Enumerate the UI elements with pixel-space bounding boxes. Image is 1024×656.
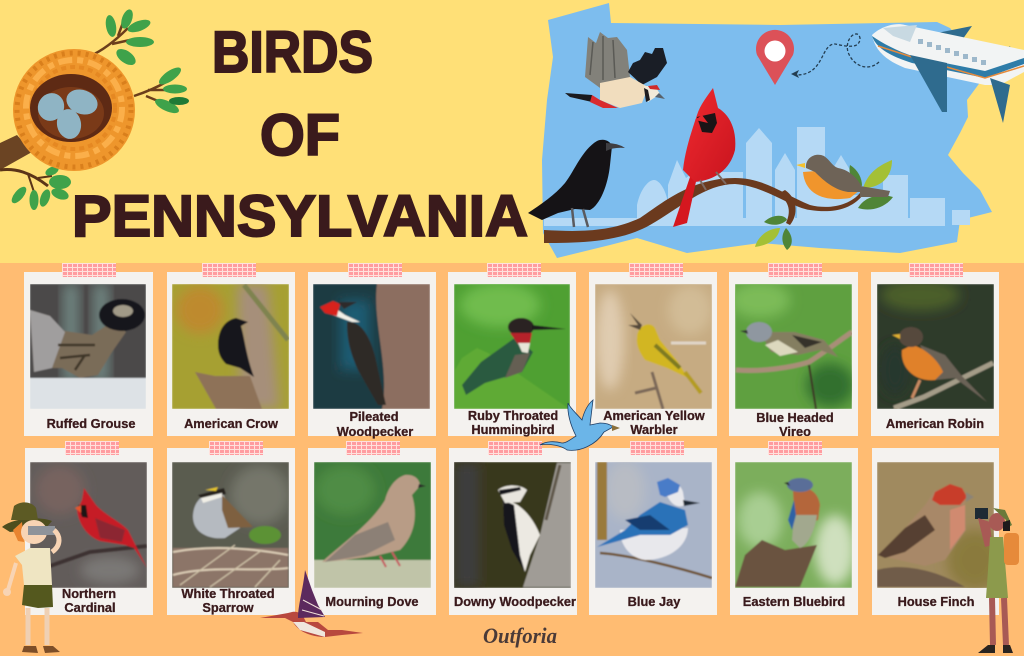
- photo card row 1: Ruffed Grouse: [24, 263, 153, 436]
- tape: [62, 263, 116, 277]
- background: orange lower section: [0, 263, 1024, 656]
- tape: [909, 263, 963, 277]
- label: Mourning Dove: [325, 594, 419, 609]
- photo card row 1: American Yellow Warbler: [589, 263, 717, 437]
- airplane: [872, 24, 1024, 123]
- Outforia logo: Outforia: [483, 623, 557, 648]
- title: BIRDS: [212, 20, 373, 85]
- leaves: [755, 160, 893, 250]
- photo card row 1: Ruby Throated Hummingbird: [448, 263, 576, 437]
- tape: [768, 441, 822, 455]
- photo card row 2: White Throated Sparrow: Sparrow: [202, 600, 254, 615]
- label: Downy Woodpecker: [454, 594, 576, 609]
- tape: [348, 263, 402, 277]
- tape: [629, 263, 683, 277]
- photo card row 1: Ruby Throated Hummingbird: Hummingbird: [471, 422, 555, 437]
- cardinal: [673, 88, 735, 227]
- tape: [346, 441, 400, 455]
- woodpecker flying: [565, 32, 667, 108]
- hummingbird overlay: [260, 570, 363, 637]
- ranger character with binoculars: [2, 502, 60, 653]
- robin: [796, 155, 890, 199]
- map shape: [542, 3, 992, 258]
- label: Ruffed Grouse: [47, 416, 135, 431]
- tape: [209, 441, 263, 455]
- illustration: nest with eggs: [0, 8, 189, 210]
- label: White Throated: [181, 586, 275, 601]
- tape: [488, 441, 542, 455]
- dashed flight path: [791, 34, 879, 78]
- label: Blue Jay: [628, 594, 681, 609]
- tape: [487, 263, 541, 277]
- photo card row 2: Northern Cardinal: [25, 441, 153, 615]
- photo card row 1: American Robin: [871, 263, 999, 436]
- title: [72, 20, 528, 249]
- photo card row 2: Mourning Dove: [308, 441, 436, 615]
- photo card row 2: Eastern Bluebird: [730, 441, 858, 615]
- title: PENNSYLVANIA: [72, 184, 528, 249]
- tape: [768, 263, 822, 277]
- title: OF: [260, 103, 340, 168]
- label: House Finch: [898, 594, 975, 609]
- tape: [630, 441, 684, 455]
- photo card row 2: Downy Woodpecker: [449, 441, 577, 615]
- photo card row 2: Northern Cardinal: Cardinal: [64, 600, 116, 615]
- photo card row 2: Blue Jay: [589, 441, 717, 615]
- city skyline: [544, 127, 970, 226]
- label: Northern: [62, 586, 116, 601]
- crow: [528, 140, 625, 227]
- branch: [544, 178, 863, 243]
- tape: [202, 263, 256, 277]
- photo card row 2: White Throated Sparrow: [167, 441, 295, 615]
- photo card row 1: Blue Headed Vireo: [729, 263, 858, 439]
- label: American Robin: [886, 416, 984, 431]
- photo card row 1: Pileated Woodpecker: Woodpecker: [337, 424, 413, 439]
- photo card row 1: Pileated Woodpecker: [308, 263, 436, 439]
- label: Pileated: [349, 409, 399, 424]
- photo card row 2: House Finch: [872, 448, 1003, 615]
- photo card row 1: Blue Headed Vireo: Vireo: [779, 424, 811, 439]
- label: American Crow: [184, 416, 278, 431]
- tape: [65, 441, 119, 455]
- explorer character with binoculars: [975, 508, 1019, 653]
- label: American Yellow: [603, 408, 705, 423]
- label: Blue Headed: [756, 410, 834, 425]
- background: yellow header: [0, 0, 1024, 263]
- photo card row 1: American Yellow Warbler: Warbler: [630, 422, 678, 437]
- label: Eastern Bluebird: [743, 594, 845, 609]
- location pin: [756, 30, 794, 85]
- map of Pennsylvania with scene: [528, 3, 1024, 258]
- small blue bird overlay: [540, 400, 620, 450]
- label: Ruby Throated: [468, 408, 558, 423]
- photo card row 1: American Crow: [167, 263, 295, 436]
